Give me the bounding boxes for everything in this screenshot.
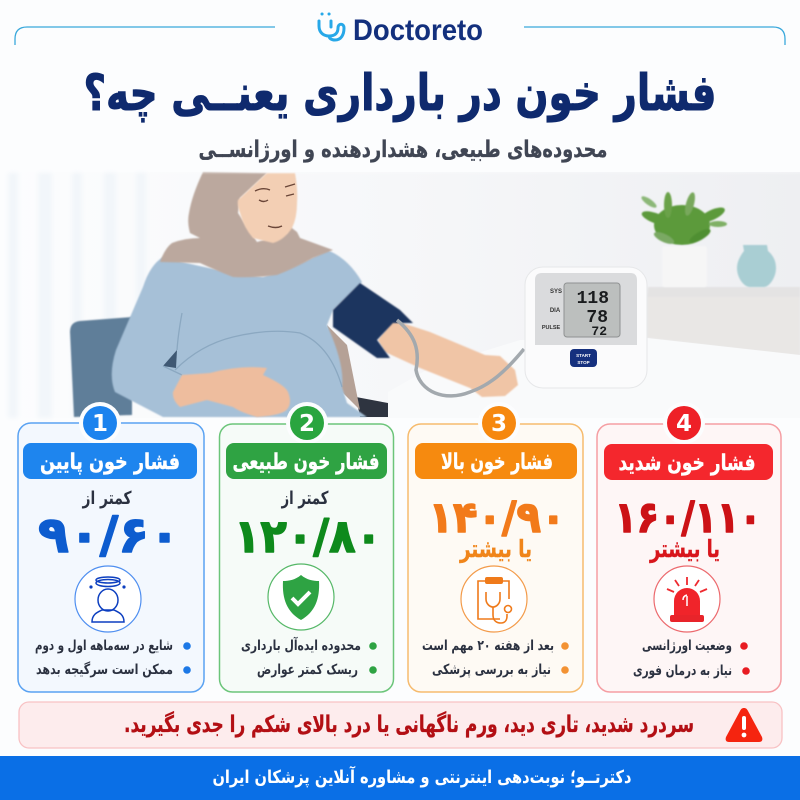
- icon: stethoscope logo: [319, 14, 344, 40]
- icon: warning triangle: [726, 708, 762, 742]
- vase: [737, 245, 776, 287]
- header bar: فشار خون شدید: [618, 451, 756, 476]
- sweater: [112, 250, 367, 417]
- bullet list: وضعیت اورژانسی: [642, 638, 732, 654]
- panel: normal blood pressure: [220, 402, 394, 692]
- plant: [640, 191, 727, 287]
- number badge: [478, 402, 520, 444]
- header bar: [23, 443, 197, 479]
- armchair: [70, 317, 132, 417]
- bullet list: شایع در سه‌ماهه اول و دوم: [35, 638, 173, 654]
- blood pressure monitor: 118: [577, 289, 609, 309]
- range value: ۱۴۰/۹۰: [428, 493, 566, 543]
- header bar: [415, 443, 577, 479]
- curtains: [8, 172, 146, 418]
- dark chair side: [356, 397, 388, 417]
- facial features: [255, 184, 295, 228]
- icon: shield check: [268, 564, 334, 630]
- table: [388, 338, 800, 418]
- blood pressure monitor: START: [576, 353, 591, 358]
- number badge: 3: [491, 411, 507, 437]
- photo wall: [0, 172, 800, 418]
- card frame: [18, 423, 204, 692]
- range label: کمتر از: [82, 488, 132, 509]
- shelf: [647, 287, 800, 356]
- arm gap shadow: [163, 350, 177, 368]
- bullet list: بعد از هفته ۲۰ مهم است: [422, 638, 554, 654]
- bullet list: [633, 638, 750, 679]
- bullet list: نیاز به بررسی پزشکی: [432, 662, 551, 678]
- sweater folds: [163, 313, 342, 387]
- cuff: [333, 283, 413, 358]
- range label: کمتر از: [281, 488, 329, 509]
- top fade above photo: [0, 165, 800, 175]
- header bar: فشار خون طبیعی: [232, 450, 380, 475]
- blood pressure monitor: 78: [586, 308, 608, 328]
- icon: dizzy person: [75, 566, 141, 632]
- blood pressure monitor: 72: [591, 324, 607, 339]
- header frame line right: [524, 27, 785, 45]
- range value: ۱۶۰/۱۱۰: [614, 493, 762, 543]
- icon: clipboard stethoscope: [461, 566, 527, 632]
- blood pressure monitor: STOP: [577, 360, 590, 365]
- number badge: [663, 402, 705, 444]
- range value: ۹۰/۶۰: [38, 506, 180, 564]
- number badge: [79, 402, 121, 444]
- tube: [397, 320, 524, 396]
- bullet list: [241, 636, 377, 678]
- header bar: فشار خون بالا: [441, 450, 553, 475]
- header bar: [226, 443, 387, 479]
- panel: low blood pressure: [18, 402, 204, 692]
- forearm: [378, 320, 518, 397]
- header bar: [604, 444, 773, 480]
- blood pressure monitor: SYS: [550, 289, 562, 295]
- hand on belly: [173, 367, 290, 417]
- bullet list: [422, 638, 569, 678]
- callout: warning: [19, 702, 782, 748]
- blood pressure monitor: [525, 267, 647, 388]
- footer band: [0, 756, 800, 800]
- card frame: [220, 424, 394, 692]
- range qualifier: یا بیشتر: [649, 535, 720, 563]
- bullet list: ریسک کمتر عوارض: [257, 662, 358, 678]
- logo: [319, 14, 483, 47]
- logo wordmark: Doctoreto: [353, 14, 483, 47]
- header frame line left: [15, 27, 275, 45]
- card frame: [597, 424, 781, 692]
- scarf back: [327, 325, 360, 410]
- face: [238, 173, 297, 243]
- footer text: دکترتــو؛ نوبت‌دهی اینترنتی و مشاوره آنلاین پزشکان ایران: [212, 765, 632, 788]
- panel: high blood pressure: [408, 402, 583, 692]
- header bar: فشار خون پایین: [40, 450, 180, 475]
- blood pressure monitor: PULSE: [542, 325, 560, 331]
- card frame: [408, 424, 583, 692]
- subtitle: محدوده‌های طبیعی، هشداردهنده و اورژانســی: [198, 137, 608, 163]
- photo: pregnant woman measuring blood pressure: [0, 172, 800, 418]
- bullet list: نیاز به درمان فوری: [633, 663, 732, 679]
- number badge: 2: [299, 411, 315, 437]
- hijab: [160, 172, 333, 277]
- range value: ۱۲۰/۸۰: [234, 509, 382, 563]
- number badge: 1: [92, 411, 108, 437]
- bullet list: ممکن است سرگیجه بدهد: [36, 661, 173, 678]
- icon: siren: [654, 566, 720, 632]
- panel: severe blood pressure: [597, 402, 781, 692]
- number badge: 4: [676, 411, 692, 437]
- bullet list: [35, 638, 191, 678]
- range qualifier: یا بیشتر: [459, 535, 532, 563]
- bullet list: محدوده ایده‌آل بارداری: [241, 636, 361, 654]
- callout box: [19, 702, 782, 748]
- blood pressure monitor: DIA: [550, 308, 561, 314]
- number badge: [286, 402, 328, 444]
